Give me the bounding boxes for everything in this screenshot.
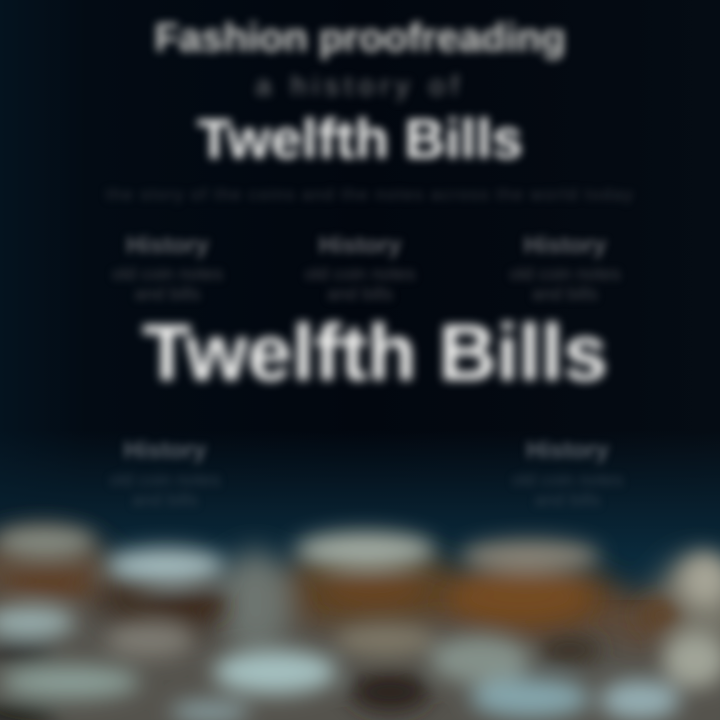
column left, lower: old coin notes — [109, 470, 221, 490]
pale tops of stones — [0, 527, 95, 557]
column right, lower — [512, 437, 623, 510]
title line two: a history of — [256, 70, 464, 101]
lower stones — [0, 607, 75, 637]
column right, lower: and bills — [534, 490, 601, 510]
background sea gradient — [0, 430, 720, 600]
illustration: pile of coins and stones — [0, 510, 720, 720]
column one, upper — [112, 232, 223, 304]
column one, upper: old coin notes — [112, 264, 223, 284]
column two, upper — [304, 232, 416, 304]
column one, upper: and bills — [134, 284, 201, 304]
column left, lower: History — [124, 437, 206, 464]
title line three: Twelfth Bills — [197, 107, 523, 170]
column left, lower — [109, 437, 221, 510]
main heading: Twelfth Bills — [142, 308, 608, 397]
column right, lower: old coin notes — [512, 470, 623, 490]
column three, upper — [509, 232, 621, 304]
title line one: Fashion proofreading — [154, 16, 566, 60]
column left, lower: and bills — [132, 490, 198, 510]
column three, upper: History — [524, 232, 606, 259]
column right, lower: History — [526, 437, 609, 464]
column three, upper: old coin notes — [509, 264, 621, 284]
column two, upper: old coin notes — [304, 264, 416, 284]
subtitle strip: the story of the coins and the notes across the world today — [106, 185, 634, 204]
column two, upper: and bills — [327, 284, 393, 304]
brown rims — [8, 568, 92, 596]
column one, upper: History — [126, 232, 209, 259]
column two, upper: History — [319, 232, 401, 259]
column three, upper: and bills — [532, 284, 598, 304]
